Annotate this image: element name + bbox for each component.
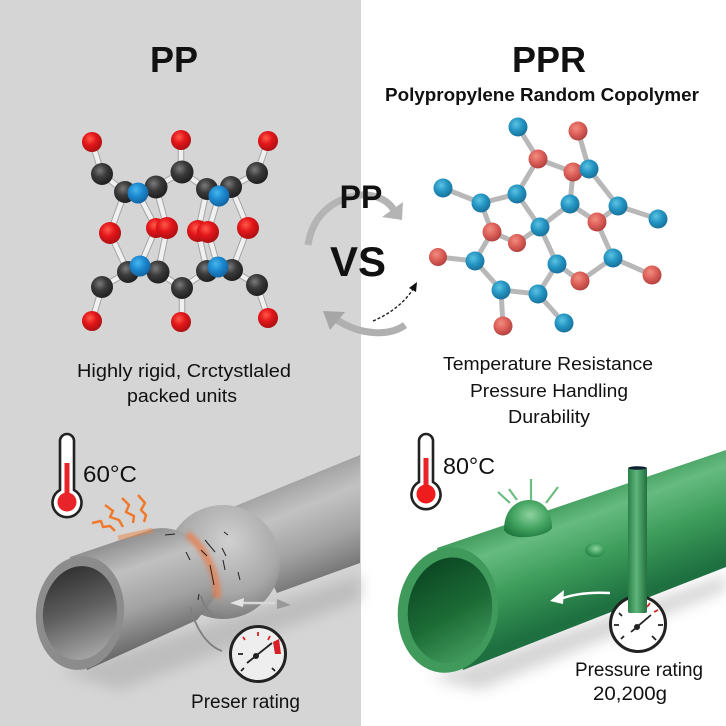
icon: PP pressure gauge (230, 626, 286, 682)
panel: PP background (0, 0, 361, 726)
icon: PPR pressure gauge (610, 596, 666, 652)
molecule: PP crystalline structure (82, 130, 278, 332)
arrow: dotted arrow (373, 282, 417, 321)
text: PP description (77, 361, 291, 406)
heading: PPR: PPR (512, 39, 586, 80)
molecule: PPR random copolymer structure (429, 118, 668, 336)
label: Preser rating: Preser rating (191, 692, 300, 713)
icon: small bump (585, 543, 605, 557)
text: PPR properties (443, 354, 653, 427)
icon: bulge with spikes (498, 479, 558, 537)
text: PPR properties: Temperature Resistance (443, 354, 653, 374)
subtitle: Polypropylene Random Copolymer: Polypropylene Random Copolymer (385, 85, 699, 105)
arrow: flow arrow (550, 590, 610, 604)
icon: heat waves (92, 495, 146, 531)
pipe: grey PP pipe with failed bulge (30, 455, 360, 690)
icon: thermometer 80°C (412, 434, 440, 509)
label: 20,200g: 20,200g (593, 684, 667, 705)
label: Pressure rating: Pressure rating (575, 660, 703, 681)
icon: thermometer 60°C (52, 434, 82, 517)
arrow: strain double arrow (230, 598, 291, 609)
label: PP centre: PP (340, 179, 382, 215)
text: PP description: Highly rigid, Crctystlaled (77, 361, 291, 381)
pipe: green PPR pipe (390, 450, 726, 690)
arrow: lower cycle arrow (323, 311, 405, 333)
text: PPR properties: Durability (508, 407, 590, 427)
label: VS: VS (330, 238, 386, 285)
panel: PPR background (361, 0, 726, 726)
arrow: curved gauge pointer (190, 596, 222, 651)
text: 80°C: 80°C (443, 453, 495, 479)
text: 60°C: 60°C (83, 461, 137, 487)
text: PPR properties: Pressure Handling (470, 381, 628, 401)
heading: PP: PP (150, 39, 198, 80)
arrow: upper cycle arrow (308, 195, 403, 245)
icon: vertical riser tube (628, 466, 647, 613)
text: PP description: packed units (127, 386, 237, 406)
